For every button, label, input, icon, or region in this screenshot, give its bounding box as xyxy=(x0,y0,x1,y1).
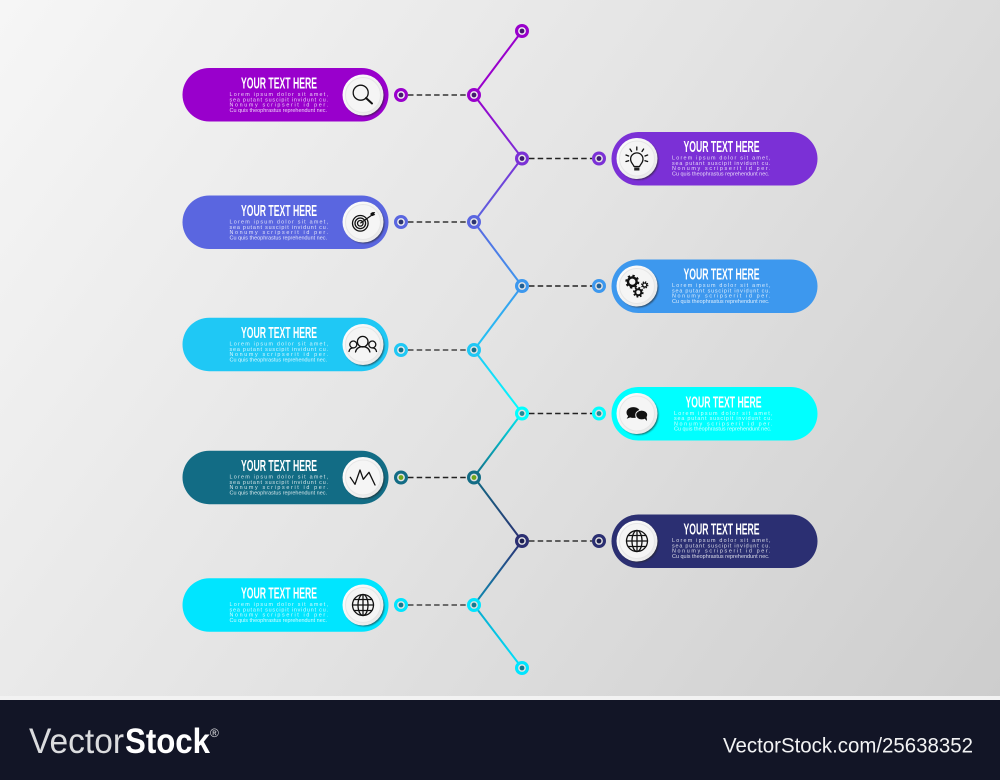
item 1: search (left) xyxy=(182,68,388,122)
item 2: idea (right) xyxy=(612,132,818,186)
pill xyxy=(612,260,818,313)
heading: YOUR TEXT HERE xyxy=(241,586,317,602)
body text: sea putant suscipit invidunt cu. xyxy=(230,480,328,486)
nodes 1 xyxy=(394,88,481,102)
body text: sea putant suscipit invidunt cu. xyxy=(230,97,328,103)
body text: Lorem ipsum dolor sit amet, xyxy=(230,220,328,226)
pill xyxy=(182,196,388,249)
body text: Nonumy scripserit id per. xyxy=(672,294,770,300)
body text: Lorem ipsum dolor sit amet, xyxy=(230,602,328,608)
body text: Cu quis theophrastus reprehendunt nec. xyxy=(230,618,327,624)
footer band xyxy=(0,696,1000,780)
pill xyxy=(182,451,388,504)
connector 1 xyxy=(408,94,467,96)
body text: Nonumy scripserit id per. xyxy=(674,421,772,427)
body text: Lorem ipsum dolor sit amet, xyxy=(230,92,328,98)
heading: YOUR TEXT HERE xyxy=(241,458,317,475)
body text: Nonumy scripserit id per. xyxy=(672,166,770,172)
body text: sea putant suscipit invidunt cu. xyxy=(674,416,772,422)
nodes 3 xyxy=(394,215,481,229)
icon: globe xyxy=(616,520,658,562)
body text: Lorem ipsum dolor sit amet, xyxy=(674,411,773,417)
body text: Lorem ipsum dolor sit amet, xyxy=(672,156,771,162)
icon: chat bubbles xyxy=(616,393,658,435)
body text: Cu quis theophrastus reprehendunt nec. xyxy=(230,108,327,114)
pill xyxy=(182,68,388,122)
heading: YOUR TEXT HERE xyxy=(684,522,760,539)
heading: YOUR TEXT HERE xyxy=(686,394,762,411)
body text: sea putant suscipit invidunt cu. xyxy=(230,347,328,353)
body text xyxy=(230,475,328,496)
body text: Cu quis theophrastus reprehendunt nec. xyxy=(230,490,327,496)
body text xyxy=(672,538,771,560)
body text xyxy=(672,283,771,305)
nodes 2 xyxy=(515,152,606,166)
item 3: target (left) xyxy=(182,196,388,249)
connector 5 xyxy=(408,349,467,351)
body text: Cu quis theophrastus reprehendunt nec. xyxy=(230,236,327,242)
heading: YOUR TEXT HERE xyxy=(684,139,760,156)
body text xyxy=(674,411,773,433)
body text: Nonumy scripserit id per. xyxy=(230,230,328,236)
connector 4 xyxy=(529,285,592,287)
body text: Nonumy scripserit id per. xyxy=(230,352,328,358)
connector 6 xyxy=(529,412,592,414)
icon: zigzag line xyxy=(342,457,384,499)
body text: Cu quis theophrastus reprehendunt nec. xyxy=(672,554,770,560)
nodes 8 xyxy=(515,534,606,548)
body text: Cu quis theophrastus reprehendunt nec. xyxy=(672,299,770,305)
body text: Lorem ipsum dolor sit amet, xyxy=(230,475,328,481)
body text: sea putant suscipit invidunt cu. xyxy=(672,543,770,549)
icon: gears xyxy=(616,266,658,308)
item 9: globe (left) xyxy=(182,578,388,632)
body text: Cu quis theophrastus reprehendunt nec. xyxy=(672,172,770,178)
icon: magnifier xyxy=(342,74,384,116)
body text: sea putant suscipit invidunt cu. xyxy=(672,161,770,167)
nodes 9 xyxy=(394,598,481,612)
body text: Cu quis theophrastus reprehendunt nec. xyxy=(230,358,327,364)
body text: Nonumy scripserit id per. xyxy=(230,485,328,491)
body text: Lorem ipsum dolor sit amet, xyxy=(672,538,771,544)
footer logo: ® xyxy=(210,726,219,740)
icon: target xyxy=(342,202,384,244)
central zigzag spine xyxy=(474,31,522,668)
item 6: chat (right) xyxy=(612,387,818,440)
heading: YOUR TEXT HERE xyxy=(684,267,760,284)
nodes 5 xyxy=(394,343,481,357)
pill xyxy=(612,132,818,186)
footer logo xyxy=(29,722,219,761)
body text xyxy=(230,602,328,624)
item 8: globe (right) xyxy=(612,514,818,568)
pill xyxy=(182,318,388,371)
icon: team of people xyxy=(342,324,384,366)
body text xyxy=(230,92,328,114)
icon: globe xyxy=(342,584,384,626)
body text xyxy=(230,342,328,364)
connector 9 xyxy=(408,604,467,606)
item 4: gears (right) xyxy=(612,260,818,313)
body text: Lorem ipsum dolor sit amet, xyxy=(230,342,328,348)
body text: Cu quis theophrastus reprehendunt nec. xyxy=(674,427,772,433)
footer logo: Vector xyxy=(29,722,124,761)
nodes 7 xyxy=(394,470,481,484)
footer image id: VectorStock.com/25638352 xyxy=(723,735,973,758)
body text xyxy=(230,220,328,242)
item 5: team (left) xyxy=(182,318,388,371)
body text: Lorem ipsum dolor sit amet, xyxy=(672,283,771,289)
body text: Nonumy scripserit id per. xyxy=(230,103,328,109)
heading: YOUR TEXT HERE xyxy=(241,203,317,220)
connector 2 xyxy=(529,158,592,160)
bottom end node xyxy=(515,661,529,675)
body text: sea putant suscipit invidunt cu. xyxy=(230,225,328,231)
nodes 4 xyxy=(515,279,606,293)
item 7: line chart (left) xyxy=(182,451,388,504)
footer logo: Stock xyxy=(125,722,210,761)
connector 3 xyxy=(408,221,467,223)
body text xyxy=(672,156,771,178)
heading: YOUR TEXT HERE xyxy=(241,76,317,93)
body text: sea putant suscipit invidunt cu. xyxy=(672,288,770,294)
pill xyxy=(182,578,388,632)
connector 7 xyxy=(408,476,467,478)
body text: Nonumy scripserit id per. xyxy=(672,549,770,555)
body text: sea putant suscipit invidunt cu. xyxy=(230,607,328,613)
pill xyxy=(612,514,818,568)
pill xyxy=(612,387,818,440)
icon: light bulb xyxy=(616,138,658,180)
body text: Nonumy scripserit id per. xyxy=(230,613,328,619)
connector 8 xyxy=(529,540,592,542)
top end node xyxy=(515,24,529,38)
nodes 6 xyxy=(515,406,606,420)
heading: YOUR TEXT HERE xyxy=(241,325,317,342)
